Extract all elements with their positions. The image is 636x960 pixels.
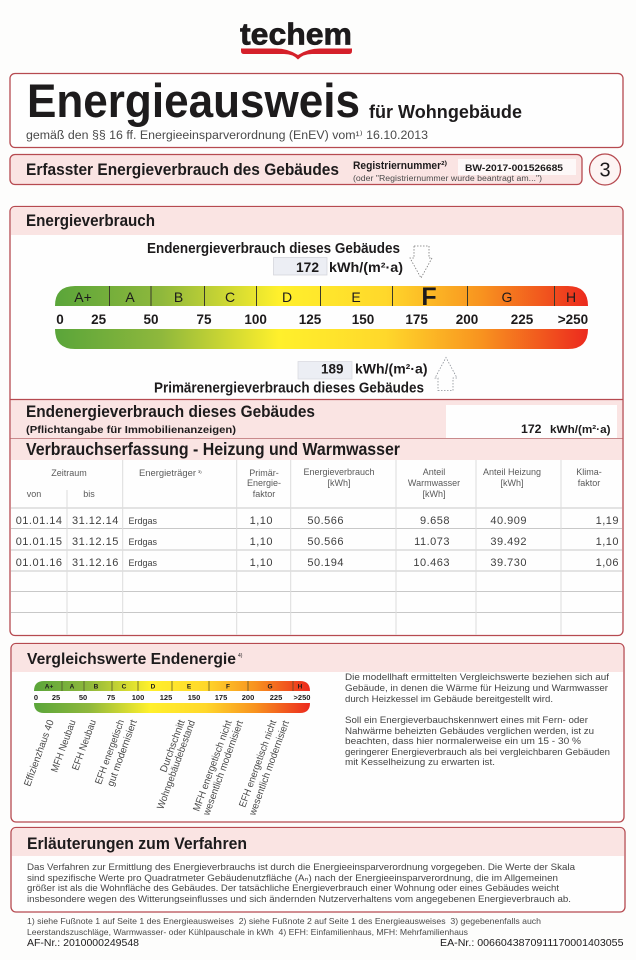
- registration label: Registriernummer²⁾: [353, 160, 447, 172]
- band: mandatory value: kWh/(m²·a): [550, 424, 611, 436]
- scale bar: energy classes: A: [125, 289, 135, 305]
- mini scale bar: C: [122, 684, 127, 690]
- explanatory text: comparison values: Gebäude, in denen die Wärme für Heizung und Warmwasser: [345, 683, 608, 694]
- table header row: Klima-: [576, 467, 602, 477]
- rotated building type labels: MFH energetisch nicht: [191, 719, 235, 813]
- table row 2015: 50.566: [307, 536, 344, 548]
- table row 2015: 01.01.15: [16, 536, 63, 548]
- table header row: faktor: [253, 489, 275, 499]
- table header row: 3): [198, 469, 202, 474]
- table row 2015: 11.073: [414, 536, 450, 548]
- rotated building type labels: wesentlich modernisiert: [201, 719, 246, 818]
- rotated building type labels: EFH energetisch: [93, 718, 127, 786]
- label: primary energy: Primärenergieverbrauch dieses Gebäudes: [154, 380, 424, 396]
- rotated building type labels: [22, 718, 292, 818]
- page number badge: [590, 154, 620, 185]
- value: 172 kWh: kWh/(m²·a): [329, 259, 403, 275]
- panel: title: [10, 74, 623, 148]
- page number badge: 3: [599, 160, 611, 182]
- mini scale gradient: [34, 703, 310, 713]
- table header row: [kWh]: [327, 478, 351, 488]
- scale bar: energy classes: D: [282, 289, 292, 305]
- explanatory text: comparison values: Die modellhaft ermittelten Vergleichswerte beziehen sich auf: [345, 672, 609, 683]
- mini scale bar: H: [298, 684, 303, 690]
- scale numbers: 125: [299, 312, 322, 327]
- panel: Vergleichswerte Endenergie: [11, 644, 624, 822]
- table header row: Energie-: [247, 478, 281, 488]
- scale numbers: 50: [143, 312, 159, 327]
- panel: registration bar: [10, 154, 582, 184]
- table header row: Energieträger: [139, 468, 196, 478]
- table header row: von: [27, 489, 41, 499]
- explanatory text: comparison values: beachten, dass hier normalerweise ein um 15 - 30 %: [345, 736, 582, 747]
- explanatory text: comparison values: [345, 672, 610, 768]
- table header row: Primär-: [249, 468, 279, 478]
- mini scale numbers: 0: [34, 693, 38, 702]
- table row 2015: Erdgas: [128, 537, 158, 547]
- document number: AF-Nr: AF-Nr.: 2010000249548: [27, 937, 139, 949]
- scale bar: energy classes: H: [566, 289, 576, 305]
- band: mandatory value: [10, 399, 622, 438]
- scale bar: energy classes: A+: [74, 289, 92, 305]
- document number: EA-Nr: EA-Nr.: 0066043870911170001403055: [440, 937, 624, 949]
- table header row: Anteil Heizung: [483, 467, 541, 477]
- table row 2015: [16, 536, 619, 548]
- table row 2014: 40.909: [490, 515, 527, 527]
- scale bar: energy classes: F: [421, 283, 437, 311]
- band: mandatory value: (Pflichtangabe für Immobilienanzeigen): [26, 424, 236, 436]
- explanatory text: comparison values: mit Kesselheizung zu erwarten ist.: [345, 757, 495, 768]
- scale numbers: >250: [558, 312, 588, 327]
- heading: Energieverbrauch: Energieverbrauch: [26, 211, 155, 230]
- table header row: [kWh]: [500, 478, 524, 488]
- band: mandatory value: 172: [521, 422, 542, 436]
- panel: Erläuterungen zum Verfahren: [11, 828, 625, 912]
- table row 2016: [16, 557, 619, 569]
- rotated building type labels: MFH Neubau: [49, 719, 79, 774]
- section header band: [12, 644, 623, 672]
- mini scale bar: G: [267, 684, 273, 690]
- explanatory text: method: insbesondere wegen des Witterungseinflusses und sich ändernden Nutzerverhaltens vom angegebenen Energieverbrauch ab.: [27, 894, 571, 905]
- mini scale bar: A+: [45, 684, 53, 690]
- scale bar: energy classes: C: [225, 289, 235, 305]
- mini scale numbers: >250: [294, 693, 310, 702]
- rotated building type labels: Durchschnitt: [158, 718, 188, 774]
- scale numbers: 25: [91, 312, 107, 327]
- explanatory text: method: Das Verfahren zur Ermittlung des Energieverbrauchs ist durch die Energieeinsparverordnung vorgegeben. Die Werte der Skala: [27, 862, 576, 873]
- scale numbers: 150: [352, 312, 374, 327]
- panel: Energieverbrauch: [10, 206, 623, 636]
- scale numbers: 0: [56, 312, 64, 327]
- scale numbers: 225: [511, 312, 534, 327]
- band: table heading: [10, 438, 622, 460]
- registration number field: [458, 159, 576, 175]
- table row 2014: Erdgas: [128, 516, 158, 526]
- table row 2015: 1,10: [250, 536, 273, 548]
- mini scale numbers: 50: [79, 693, 87, 702]
- mini scale numbers: 225: [270, 693, 282, 702]
- arrow: primary energy marker: [435, 358, 457, 390]
- band: mandatory value: Endenergieverbrauch dieses Gebäudes: [26, 402, 315, 421]
- rotated building type labels: wesentlich modernisiert: [247, 719, 292, 818]
- rotated building type labels: Wohngebäudebestand: [155, 719, 198, 811]
- table header row: faktor: [578, 478, 600, 488]
- table row 2015: 31.12.15: [72, 536, 119, 548]
- rotated building type labels: EFH Neubau: [70, 718, 99, 772]
- mini scale bar: F: [226, 684, 230, 690]
- table row 2014: 50.566: [307, 515, 344, 527]
- rotated building type labels: gut modernisiert: [105, 718, 140, 788]
- mini scale numbers: 125: [160, 693, 172, 702]
- panel: Vergleichswerte Endenergie: 4): [238, 653, 243, 659]
- table row 2016: Erdgas: [128, 558, 158, 568]
- scale bar: energy classes: G: [502, 289, 512, 305]
- title: Energieausweis: Energieausweis: [27, 74, 360, 127]
- legal basis line: gemäß den §§ 16 ff. Energieeinsparverordnung (EnEV) vom¹⁾ 16.10.2013: [26, 129, 428, 142]
- table row 2015: 39.492: [490, 536, 527, 548]
- mini scale numbers: 25: [52, 693, 60, 702]
- table row 2015: 1,10: [596, 536, 619, 548]
- explanatory text: method: größer ist als die Wohnfläche des Gebäudes. Der tatsächliche Energieverbrauch einer Wohnung oder eines Gebäudes weicht: [27, 883, 559, 894]
- table header row: Zeitraum: [51, 468, 87, 478]
- explanatory text: method: [27, 862, 576, 905]
- label: final energy: Endenergieverbrauch dieses Gebäudes: [147, 241, 400, 257]
- heading: Erfasster Energieverbrauch: Erfasster Energieverbrauch des Gebäudes: [26, 160, 339, 179]
- mini scale numbers: [34, 693, 310, 702]
- footnotes: 1) siehe Fußnote 1 auf Seite 1 des Energieausweises 2) siehe Fußnote 2 auf Seite 1 des Energieausweises 3) gegebenenfalls auch: [27, 916, 541, 926]
- rotated building type labels: Effizienzhaus 40: [22, 718, 57, 788]
- table header row: Warmwasser: [408, 478, 460, 488]
- mini scale numbers: 200: [242, 693, 254, 702]
- table row 2014: 1,10: [250, 515, 273, 527]
- footnotes: Leerstandszuschläge, Warmwasser- oder Kühlpauschale in kWh 4) EFH: Einfamilienhaus, MFH: Mehrfamilienhaus: [27, 927, 468, 937]
- scale bar: energy classes: E: [351, 289, 361, 305]
- mini scale bar: D: [151, 684, 156, 690]
- value: 189 kWh: kWh/(m²·a): [355, 360, 428, 376]
- explanatory text: comparison values: Soll ein Energieverbauchskennwert eines mit Fern- oder: [345, 715, 588, 726]
- arrow: final energy marker: [410, 246, 432, 278]
- heading: Erläuterungen: Erläuterungen zum Verfahren: [27, 834, 247, 853]
- table row 2014: 9.658: [420, 515, 450, 527]
- table row 2014: [16, 515, 619, 527]
- mini scale bar: A: [70, 684, 75, 690]
- table row 2016: 1,06: [596, 557, 619, 569]
- table row 2016: 01.01.16: [16, 557, 63, 569]
- mini scale bar: [34, 681, 310, 691]
- table row 2016: 31.12.16: [72, 557, 119, 569]
- mini scale numbers: 175: [215, 693, 227, 702]
- mini scale numbers: 75: [107, 693, 115, 702]
- table row 2016: 39.730: [490, 557, 527, 569]
- subtitle: für Wohngebäude: für Wohngebäude: [369, 102, 522, 122]
- heading: Vergleichswerte: Vergleichswerte Endenergie: [27, 651, 236, 668]
- scale numbers: 175: [405, 312, 428, 327]
- value: 172 kWh: 172: [296, 259, 319, 275]
- mini scale numbers: 150: [188, 693, 200, 702]
- logo: techem: techem: [240, 16, 352, 52]
- table row 2014: 31.12.14: [72, 515, 119, 527]
- explanatory text: comparison values: geringerer Energieverbrauch als bei vergleichbaren Gebäuden: [345, 747, 610, 758]
- table header row: [kWh]: [422, 489, 446, 499]
- registration note: (oder "Registriernummer wurde beantragt am..."): [353, 174, 542, 183]
- section header band: [11, 207, 622, 235]
- table row 2014: 01.01.14: [16, 515, 63, 527]
- mini scale numbers: 100: [132, 693, 144, 702]
- footnotes: [27, 916, 541, 937]
- explanatory text: comparison values: Nahwärme beheizten Gebäudes verglichen werden, ist zu: [345, 726, 594, 737]
- table header row: Anteil: [423, 467, 445, 477]
- value: 189 kWh: 189: [321, 360, 344, 376]
- scale bar: energy classes: B: [174, 289, 183, 305]
- table header row: bis: [83, 489, 95, 499]
- table header row: [27, 467, 602, 499]
- scale numbers: 100: [244, 312, 267, 327]
- explanatory text: method: sind spezifische Werte pro Quadratmeter Gebäudenutzfläche (Aₙ) nach der Energieeinsparverordnung, die im Allgemeinen: [27, 873, 558, 884]
- value: 189 kWh: [298, 360, 428, 379]
- mini scale bar: E: [187, 684, 192, 690]
- scale bar: gradient: [55, 329, 588, 349]
- value: 172 kWh: [274, 258, 403, 275]
- table row 2016: 1,10: [250, 557, 273, 569]
- explanatory text: comparison values: durch Heizkessel im Gebäude bereitgestellt wird.: [345, 694, 553, 705]
- scale numbers: [56, 312, 588, 327]
- scale numbers: 200: [456, 312, 478, 327]
- table row 2014: 1,19: [596, 515, 619, 527]
- table: consumption records: [11, 460, 622, 635]
- registration number: BW-2017-001526685: [465, 163, 564, 174]
- scale bar: energy classes: [55, 283, 588, 311]
- mini scale bar: B: [94, 684, 99, 690]
- section header band: [12, 828, 624, 856]
- table header row: Energieverbrauch: [303, 467, 375, 477]
- scale numbers: 75: [196, 312, 212, 327]
- table row 2016: 50.194: [307, 557, 344, 569]
- band: table heading: Verbrauchserfassung - Heizung und Warmwasser: [26, 439, 400, 459]
- rotated building type labels: EFH energetisch nicht: [237, 719, 279, 809]
- table row 2016: 10.463: [413, 557, 450, 569]
